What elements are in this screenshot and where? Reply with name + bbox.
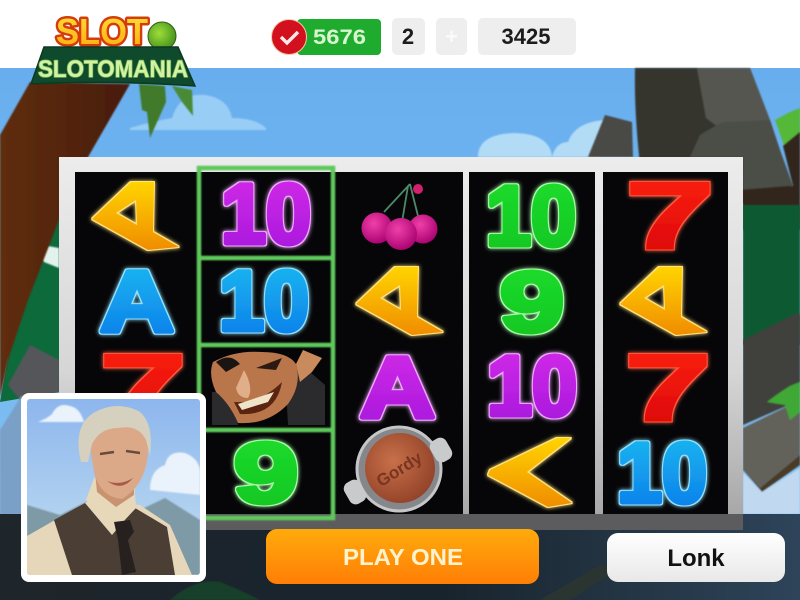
palm trunk <box>0 82 130 398</box>
plus box: + <box>445 24 458 49</box>
symbol: blue A: A <box>100 254 174 350</box>
logo: SLOTOMANIA wordmark: SLOTOMANIA <box>38 56 188 83</box>
symbol: copper medal <box>341 427 455 511</box>
clouds <box>38 405 200 495</box>
reel 3 symbols <box>341 184 455 511</box>
reel frame <box>59 157 743 530</box>
symbol: green 9: 9 <box>500 255 564 349</box>
vest <box>54 503 175 575</box>
tie <box>114 520 136 575</box>
left mountain <box>0 395 22 515</box>
icon: check <box>272 20 306 54</box>
palm leaves <box>139 84 193 138</box>
reel 2 background <box>197 172 337 514</box>
symbol: green 9: 9 <box>234 426 298 520</box>
logo <box>31 11 195 86</box>
symbol: troll face <box>211 350 325 425</box>
logo: banner <box>31 47 195 86</box>
lonk button: Lonk <box>667 545 725 572</box>
reel 5 background <box>603 172 728 514</box>
symbol: blue 10: 10 <box>617 426 707 520</box>
symbol: red 7: 7 <box>626 163 714 268</box>
portrait card <box>21 393 206 582</box>
left jungle <box>0 210 59 402</box>
symbol: red 7: 7 <box>625 335 711 440</box>
play one button <box>266 529 539 584</box>
credits box <box>478 18 576 55</box>
reel 4 symbols <box>486 169 577 507</box>
reel 5 symbols <box>617 163 714 520</box>
win highlight box <box>199 168 333 518</box>
face <box>90 427 148 499</box>
bottom dark bar <box>0 514 800 600</box>
left rock <box>8 345 59 400</box>
reel 4 background <box>469 172 595 514</box>
right jungle <box>743 205 800 345</box>
counter box <box>392 18 425 55</box>
symbol: cherries <box>362 184 438 250</box>
symbol: purple 10: 10 <box>221 167 311 261</box>
neck and collar <box>86 478 136 520</box>
small rock <box>588 115 633 157</box>
bottom plank <box>540 565 620 600</box>
hair <box>78 406 151 462</box>
credits box: 3425 <box>502 24 550 49</box>
symbol: blue 10: 10 <box>219 254 309 348</box>
reel 1 background <box>75 172 197 514</box>
shirt <box>27 500 192 575</box>
background scene <box>0 68 800 518</box>
play one button: PLAY ONE <box>343 544 463 570</box>
left light patch <box>41 246 59 268</box>
cloud left <box>130 95 266 130</box>
symbol: gold chevron <box>488 438 572 507</box>
plus box <box>436 18 467 55</box>
symbol: copper medal: Gordy <box>373 448 426 491</box>
symbol: gold wedge <box>356 267 443 335</box>
lonk button <box>607 533 785 582</box>
header bar <box>0 0 800 68</box>
symbol: green 10: 10 <box>486 169 576 263</box>
score badge <box>272 19 381 55</box>
right dark rock <box>743 132 800 230</box>
bottom foliage <box>170 581 260 600</box>
symbol: purple 10: 10 <box>487 339 577 433</box>
counter box: 2 <box>402 24 414 49</box>
reel 3 background <box>337 172 463 514</box>
mountains <box>27 498 200 575</box>
clouds centre <box>478 120 605 157</box>
big rock <box>635 68 793 205</box>
symbol: gold wedge <box>92 182 179 250</box>
logo: green ball <box>148 22 176 50</box>
reel 2 highlighted column <box>199 167 333 520</box>
symbol: red 7: 7 <box>100 335 186 440</box>
right rock ledge <box>743 313 800 514</box>
right bush <box>775 108 800 148</box>
logo: SLOT wordmark: SLOT <box>56 11 148 52</box>
reel 1 symbols <box>92 182 186 440</box>
symbol: gold wedge <box>620 267 707 335</box>
symbol: purple A: A <box>360 340 435 436</box>
score value: 5676 <box>313 26 366 49</box>
